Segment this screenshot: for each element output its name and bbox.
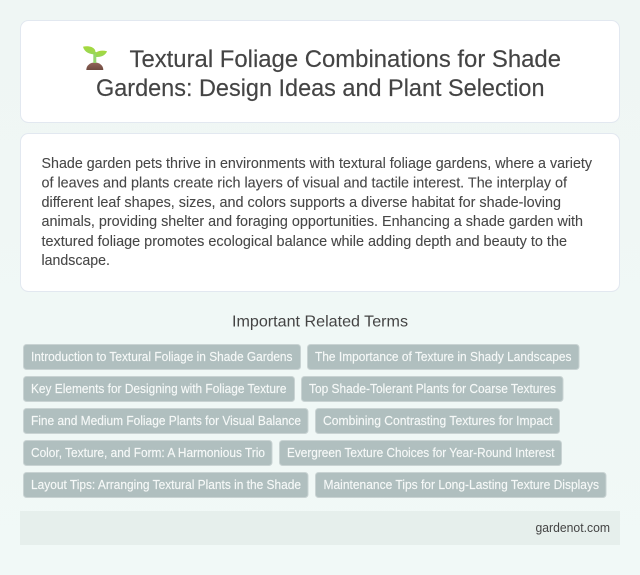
tag	[24, 408, 308, 434]
tag	[280, 440, 562, 466]
tag	[24, 472, 308, 498]
tag list	[24, 344, 606, 498]
tag: Layout Tips: Arranging Textural Plants in the Shade	[31, 478, 301, 492]
tag: Fine and Medium Foliage Plants for Visual Balance	[31, 414, 301, 428]
tag	[316, 472, 606, 498]
tag	[24, 440, 272, 466]
tag: Introduction to Textural Foliage in Shade Gardens	[31, 350, 292, 364]
description text: textured foliage promotes ecological balance while adding depth and beauty to the	[42, 233, 567, 250]
tag: Maintenance Tips for Long-Lasting Texture Displays	[324, 478, 599, 492]
tag	[308, 344, 579, 370]
title	[96, 46, 561, 102]
panel: title card	[20, 20, 620, 122]
description text: of leaves and plants create rich layers of visual and tactile interest. The interplay of	[42, 174, 568, 192]
tag: Color, Texture, and Form: A Harmonious Trio	[31, 446, 265, 460]
description text	[42, 155, 592, 269]
description text: different leaf shapes, sizes, and colors supports a diverse habitat for shade-loving	[42, 194, 561, 211]
title: Textural Foliage Combinations for Shade	[130, 46, 561, 73]
title: Gardens: Design Ideas and Plant Selection	[96, 75, 544, 102]
footer: gardenot.com	[536, 520, 610, 535]
description text: Shade garden pets thrive in environments with textural foliage gardens, where a variety	[42, 155, 592, 172]
tag: Key Elements for Designing with Foliage Texture	[31, 382, 287, 396]
panel: description card	[20, 134, 620, 292]
tag	[316, 408, 560, 434]
icon: sprout	[83, 46, 107, 70]
description text: animals, providing shelter and foraging opportunities. Enhancing a shade garden with	[42, 213, 583, 230]
tag: Evergreen Texture Choices for Year-Round Interest	[287, 446, 555, 460]
tag: Top Shade-Tolerant Plants for Coarse Textures	[309, 382, 556, 396]
tag	[24, 344, 300, 370]
tag	[302, 376, 563, 402]
heading: important related terms: Important Related Terms	[232, 314, 408, 330]
tag	[24, 376, 294, 402]
footer	[20, 511, 620, 545]
tag: The Importance of Texture in Shady Landscapes	[315, 350, 572, 364]
tag: Combining Contrasting Textures for Impact	[323, 414, 553, 428]
description text: landscape.	[42, 252, 110, 269]
